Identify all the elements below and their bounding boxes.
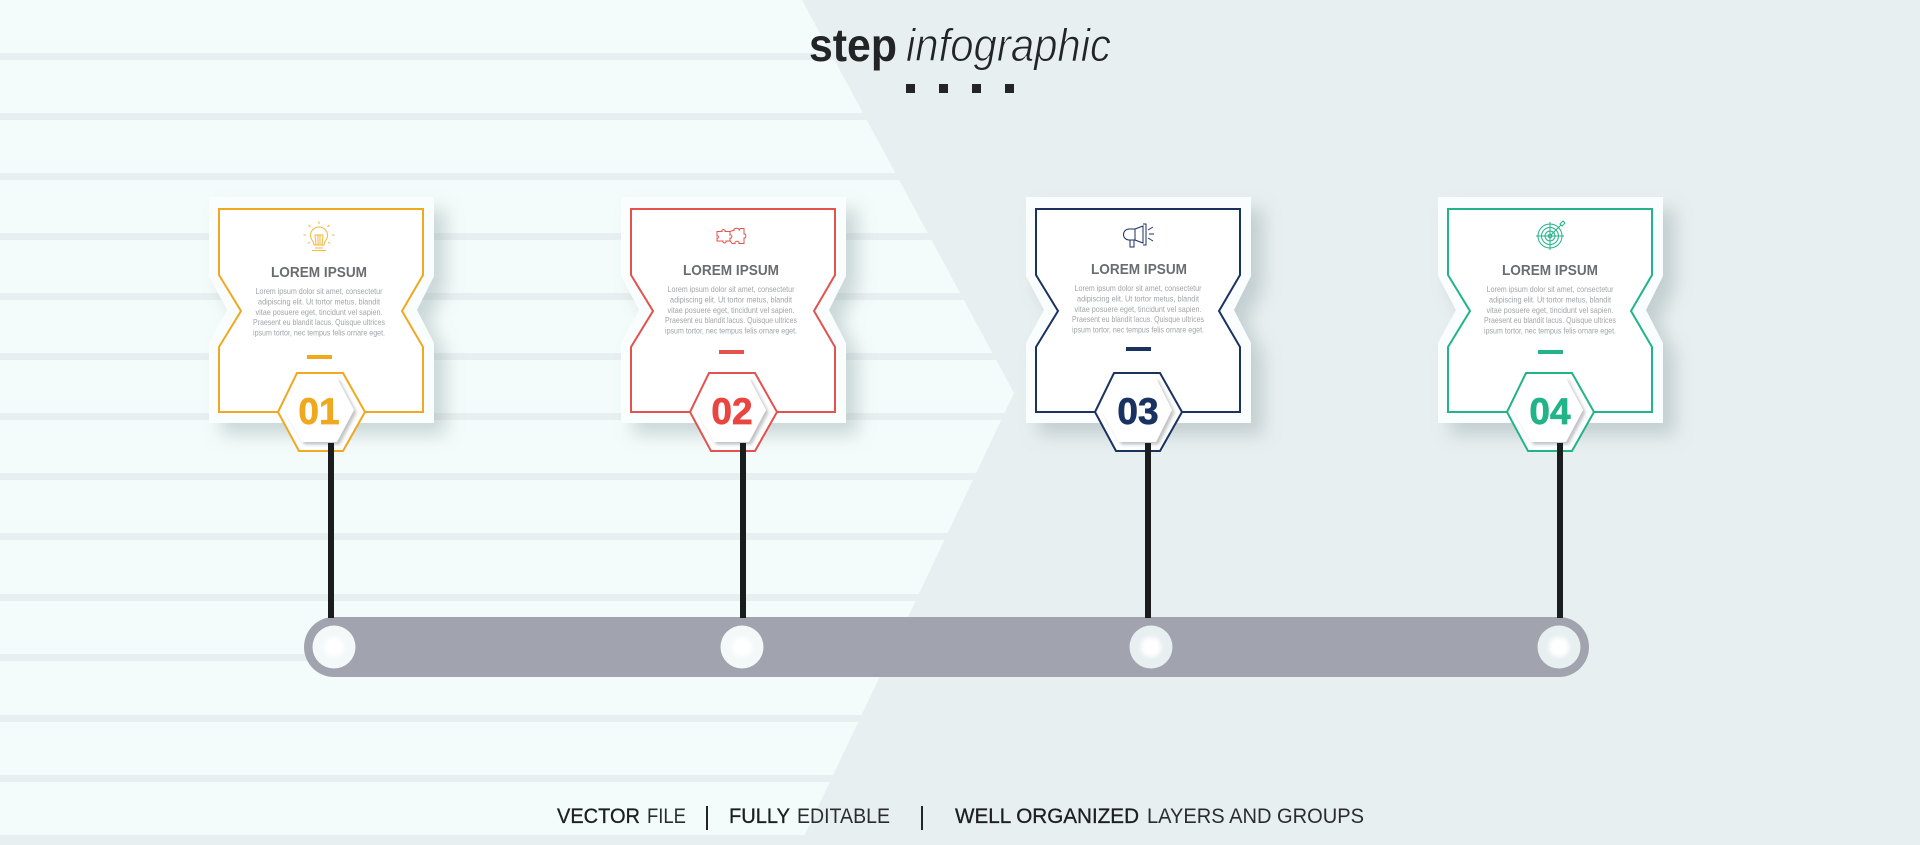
number hexagon: [1507, 373, 1594, 451]
body text: adipiscing elit. Ut tortor metus, blandit: [1489, 294, 1612, 304]
inner white area: [632, 210, 834, 411]
footer text: LAYERS AND GROUPS: [1147, 805, 1364, 828]
number hexagon: 02: [711, 391, 753, 432]
connector stem 1: [328, 443, 334, 618]
connector stem 3: [1145, 443, 1151, 618]
heading: LOREM IPSUM: [683, 263, 779, 279]
body text: Lorem ipsum dolor sit amet, consectetur: [1486, 284, 1614, 294]
body text: ipsum tortor, nec tempus felis ornare eget.: [665, 326, 797, 336]
footer text: EDITABLE: [797, 805, 890, 828]
title: infographic: [906, 19, 1111, 71]
card body: [1438, 197, 1663, 423]
inner white area: [1449, 210, 1651, 411]
heading: LOREM IPSUM: [1502, 263, 1598, 279]
card body: [209, 197, 434, 423]
title: step: [809, 19, 897, 71]
body text: Praesent eu blandit lacus. Quisque ultrices: [1072, 314, 1204, 324]
body text: [253, 286, 385, 338]
dash: [307, 355, 332, 359]
timeline node 1: [312, 626, 356, 668]
connector stem 2: [740, 443, 746, 618]
body text: [1072, 283, 1204, 335]
heading: LOREM IPSUM: [271, 265, 367, 281]
footer text: FILE: [647, 805, 686, 828]
coloured frame: [219, 209, 423, 412]
dash: [1538, 350, 1563, 354]
body text: vitae posuere eget, tincidunt vel sapien.: [668, 305, 794, 315]
inner white area: [1037, 210, 1239, 411]
timeline node 4: [1538, 626, 1580, 668]
coloured frame: [631, 209, 835, 412]
title dots: [906, 84, 1014, 93]
body text: vitae posuere eget, tincidunt vel sapien.: [256, 307, 382, 317]
number hexagon: 01: [298, 391, 340, 432]
body text: Lorem ipsum dolor sit amet, consectetur: [256, 286, 383, 296]
number hexagon: [690, 373, 777, 451]
timeline bar: [304, 617, 1589, 677]
panel: step 03: [1026, 197, 1251, 451]
coloured frame: [1448, 209, 1652, 412]
number hexagon: 04: [1529, 391, 1571, 432]
coloured frame: [1036, 209, 1240, 412]
dash: [719, 350, 744, 354]
body text: adipiscing elit. Ut tortor metus, blandit: [670, 294, 793, 304]
card body: [1026, 197, 1251, 423]
footer text: [557, 805, 1364, 830]
connector stem 4: [1557, 443, 1563, 618]
panel: step 01: [209, 197, 434, 451]
title: [809, 19, 1111, 71]
body text: Praesent eu blandit lacus. Quisque ultrices: [253, 317, 385, 327]
body text: adipiscing elit. Ut tortor metus, blandit: [1077, 293, 1200, 303]
body text: Praesent eu blandit lacus. Quisque ultrices: [1484, 315, 1616, 325]
footer text: FULLY: [729, 805, 790, 828]
body text: ipsum tortor, nec tempus felis ornare eget.: [1484, 326, 1616, 336]
dash: [1126, 347, 1151, 351]
timeline node 3: [1130, 626, 1172, 668]
panel: step 04: [1438, 197, 1663, 451]
icon: puzzle: [717, 228, 746, 244]
body text: Lorem ipsum dolor sit amet, consectetur: [1074, 283, 1202, 293]
background: striped chevron arrow: [0, 0, 1100, 845]
body text: ipsum tortor, nec tempus felis ornare eget.: [1072, 325, 1204, 335]
heading: LOREM IPSUM: [1091, 262, 1187, 278]
number hexagon: [1095, 373, 1182, 451]
body text: adipiscing elit. Ut tortor metus, blandit: [258, 296, 381, 306]
panel: step 02: [621, 197, 846, 451]
body text: Lorem ipsum dolor sit amet, consectetur: [668, 284, 795, 294]
body text: ipsum tortor, nec tempus felis ornare eget.: [253, 328, 385, 338]
timeline node 2: [720, 626, 764, 668]
icon: target: [1536, 221, 1565, 250]
icon: light bulb: [304, 222, 334, 250]
body text: [665, 284, 797, 336]
card body: [621, 197, 846, 423]
footer text: VECTOR: [557, 805, 640, 828]
number hexagon: [278, 373, 365, 451]
body text: Praesent eu blandit lacus. Quisque ultrices: [665, 315, 797, 325]
body text: vitae posuere eget, tincidunt vel sapien.: [1486, 305, 1614, 315]
body text: [1484, 284, 1616, 336]
inner white area: [220, 210, 422, 411]
icon: megaphone: [1124, 224, 1154, 247]
body text: vitae posuere eget, tincidunt vel sapien.: [1074, 304, 1202, 314]
footer text: WELL ORGANIZED: [955, 805, 1139, 828]
number hexagon: 03: [1117, 391, 1159, 432]
